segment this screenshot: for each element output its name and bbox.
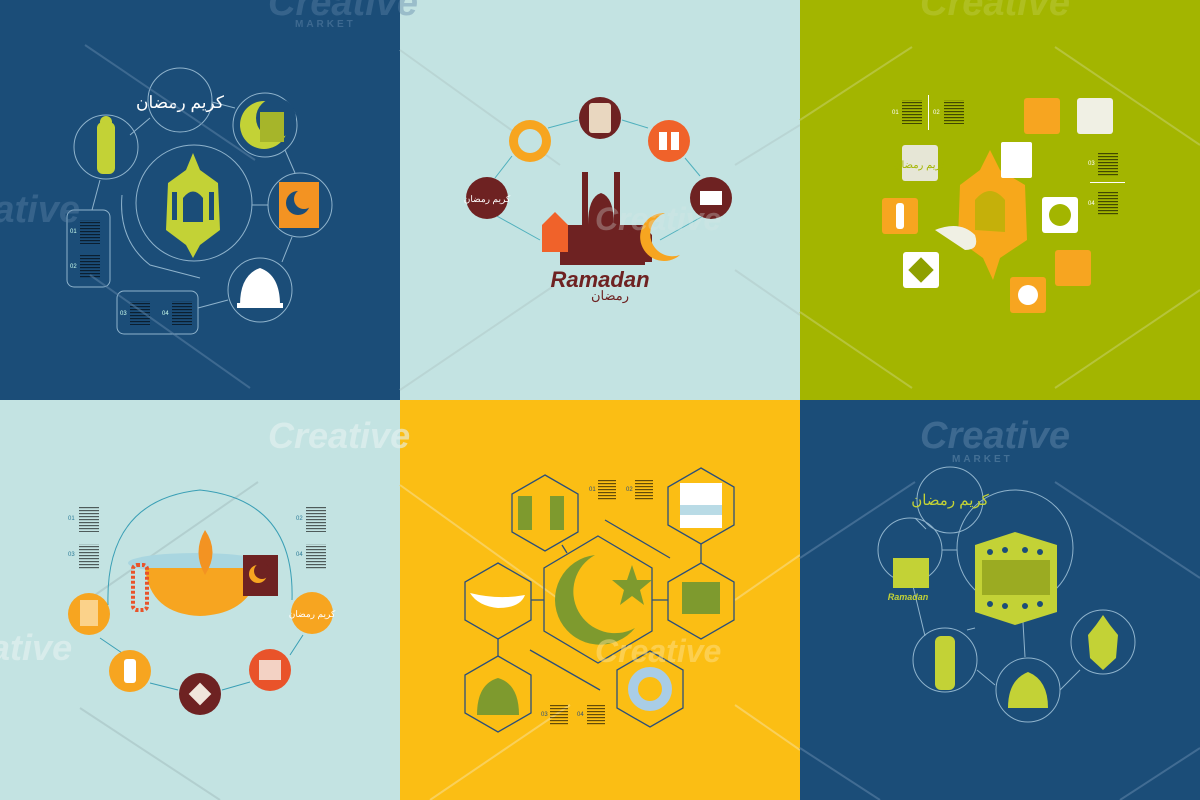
icon circles: كريم رمضان [464,194,511,205]
icon: crescent star [555,555,652,645]
icon: book [279,182,319,228]
hex icons [470,483,722,715]
icon: oil lamp [128,530,278,616]
icon: orange lantern [935,150,1027,280]
panel: bottom-middle yellow [400,400,800,800]
panel: bottom-middle yellow: 01 [589,487,596,493]
text blocks: 01 [70,229,77,235]
icon: big lantern [975,532,1057,625]
icon: crescent [640,213,680,261]
text blocks: 01 [892,110,899,116]
mosque silhouette [542,172,652,265]
text blocks: 02 [933,110,940,116]
panel: bottom-right blue [800,400,1200,800]
text blocks: 03 [120,311,127,317]
watermarks: Creative [595,201,721,237]
icon: crescent mosque [240,98,296,149]
watermarks [0,0,1070,669]
text blocks [70,220,192,325]
text blocks: 04 [296,552,303,558]
panel: top-middle light blue [400,0,800,400]
panel: top-middle light blue: رمضان [591,288,629,304]
panel: bottom-right blue: Ramadan [888,592,929,602]
text blocks: 02 [70,264,77,270]
icon circles [68,592,336,715]
icon circles [464,97,732,219]
icon: mosque dome [237,268,283,308]
watermarks: Creative [268,415,410,456]
text blocks: 03 [1088,161,1095,167]
text: arabic: كريم رمضان [136,93,225,113]
panel: bottom-right blue: كريم رمضان [911,492,990,509]
text blocks: 04 [1088,201,1095,207]
text blocks: 01 [68,516,75,522]
text blocks [892,95,1125,216]
panel: bottom-left light blue [0,400,400,800]
title: Ramadan: Ramadan [550,267,650,292]
watermarks: Creative [595,633,721,669]
panel: top-right green [800,0,1200,400]
panel: top-right green: كريم رمضان [894,160,946,171]
panel: bottom-middle yellow: 04 [577,712,584,718]
text blocks [68,507,326,569]
icon: figure [97,116,115,174]
text blocks: 03 [68,552,75,558]
text blocks: 02 [296,516,303,522]
icon circles: كريم رمضان [289,609,336,620]
icon tiles [882,98,1113,313]
panel: bottom-middle yellow: 03 [541,712,548,718]
panel: bottom-middle yellow: 02 [626,487,633,493]
watermarks: MARKET [952,454,1013,465]
icon: lantern [166,153,220,258]
watermarks: Creative [920,415,1070,457]
text blocks: 04 [162,311,169,317]
watermarks: MARKET [295,19,356,30]
panel: top-left blue [0,0,400,400]
